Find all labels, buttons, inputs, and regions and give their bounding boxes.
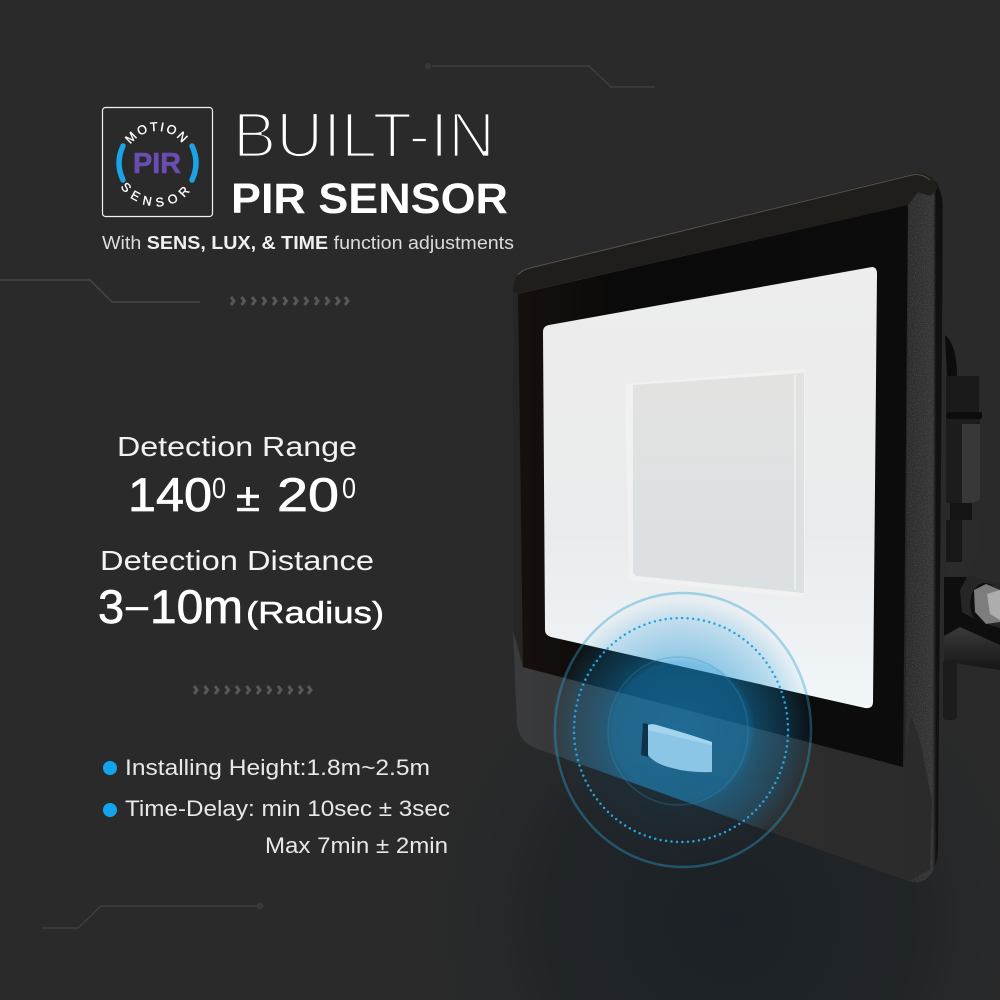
text: detection range value: 0 [212, 473, 226, 505]
text: max time delay: Max 7min ± 2min [265, 833, 448, 858]
text: detection range value: ± [236, 476, 260, 520]
decorative circuit line: left [0, 280, 200, 302]
decorative circuit line: top [425, 63, 655, 87]
text: detection distance value: 3 [98, 580, 124, 633]
chevrons: lower row [194, 686, 311, 694]
sensor rings [555, 593, 811, 867]
lamp housing [513, 173, 943, 882]
heading: PIR SENSOR: PIR SENSOR [231, 175, 508, 223]
subheading: With SENS, LUX, & TIME function adjustments [102, 233, 514, 253]
text: detection distance value: (Radius) [246, 595, 384, 630]
lamp black bezel [518, 205, 908, 767]
decorative circuit line: bottom [42, 902, 264, 928]
lamp diffuser window [625, 369, 805, 598]
bullet: time delay: Time-Delay: min 10sec ± 3sec [125, 796, 450, 821]
lamp bottom band [513, 630, 932, 881]
blue arc right [192, 146, 196, 180]
mounting connector [945, 335, 982, 576]
text: detection range value: 140 [128, 468, 212, 521]
text: detection distance value [98, 580, 384, 633]
text: detection range value: 20 [277, 468, 339, 521]
sensor glow on lamp [553, 601, 810, 830]
text: detection range value [128, 468, 356, 521]
bullet: installing height: Installing Height:1.8m~2.5m [125, 755, 430, 780]
text: detection range value: 0 [342, 473, 356, 505]
blue arc left [119, 146, 123, 180]
mounting bracket arm with bolt [943, 575, 1000, 720]
text: detection distance value: 10m [150, 580, 243, 633]
badge SENSOR text: SENSOR [121, 182, 190, 207]
icon: PIR motion sensor badge [102, 106, 214, 218]
PIR sensor head [641, 723, 712, 772]
text: detection distance value: – [126, 584, 149, 628]
badge MOTION text: MOTION [124, 122, 188, 144]
lamp white panel [543, 267, 877, 708]
sensor glow outside lamp [535, 730, 812, 900]
lamp top rim [513, 173, 938, 293]
lamp side textured frame [905, 180, 945, 890]
heading: BUILT-IN: BUILT-IN [233, 99, 495, 171]
product: floodlight [513, 173, 1000, 900]
chevrons: upper row [231, 297, 348, 305]
lamp top rim highlight [518, 175, 930, 275]
text: detection range label: Detection Range [117, 431, 357, 462]
badge PIR text: PIR [133, 148, 181, 180]
text: detection distance label: Detection Distance [100, 545, 374, 576]
